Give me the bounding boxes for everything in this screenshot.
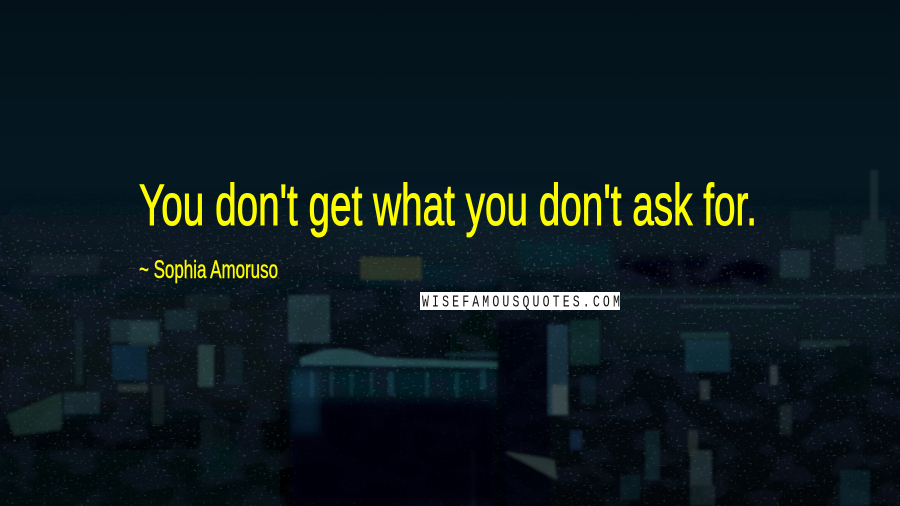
right skyline [620,295,900,298]
lower buildings right [505,452,557,480]
river reflection glow [293,372,319,432]
dark patches and light specks [0,202,900,506]
bridge [300,349,500,368]
author attribution: ~ Sophia Amoruso [139,256,278,284]
water reflections [310,372,314,398]
buildings left [110,320,160,342]
watermark badge: WISEFAMOUSQUOTES.COM [422,294,620,312]
central tower [497,320,550,506]
rounded building right [685,340,730,372]
calm river area [290,400,495,506]
golden building [360,257,422,280]
